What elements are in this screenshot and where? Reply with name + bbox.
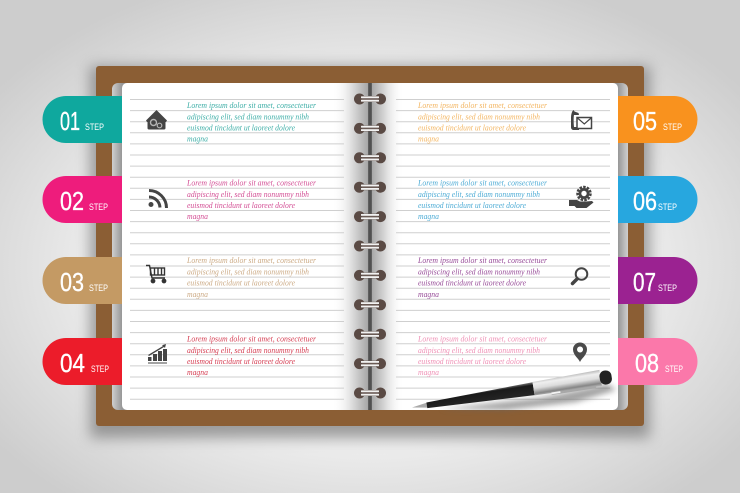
text block 7: adipiscing elit, sed diam nonummy nibh [418,266,540,276]
icon: map pin [573,342,587,362]
text block 8: Lorem ipsum dolor sit amet, consectetuer [417,334,548,344]
tab 06: 06 [633,186,657,216]
tab 08: STEP [665,364,683,375]
tab 08 [618,338,698,385]
text block 6: magna [418,211,439,221]
tab 04 [42,338,122,385]
text block 3: adipiscing elit, sed diam nonummy nibh [187,266,309,276]
under sheets [112,83,628,410]
tab 05: 05 [633,106,657,136]
text block 5: Lorem ipsum dolor sit amet, consectetuer [417,100,548,110]
text block 4: adipiscing elit, sed diam nonummy nibh [187,345,309,355]
tab 02: 02 [60,186,84,216]
tabs [42,96,697,385]
text block 6 [417,178,548,221]
tab 02: STEP [89,202,108,213]
tab 06: STEP [658,202,677,213]
text block 7 [417,255,548,299]
icon: rss [148,190,166,208]
pen [411,368,616,416]
tab 01 [42,96,122,143]
notebook pages [122,83,618,410]
text block 1: adipiscing elit, sed diam nonummy nibh [187,112,309,122]
tab 07 [618,257,698,304]
text block 4 [186,334,317,377]
text block 2: euismod tincidunt ut laoreet dolore [187,200,295,210]
icon: magnifier [572,268,587,284]
text block 2: magna [187,211,208,221]
text block 2: Lorem ipsum dolor sit amet, consectetuer [186,178,317,188]
text block 8 [417,334,548,377]
text block 1: Lorem ipsum dolor sit amet, consectetuer [186,100,317,110]
notebook cover [90,66,650,438]
text block 4: euismod tincidunt ut laoreet dolore [187,356,295,366]
tab 01: 01 [60,106,80,136]
tab 07: 07 [633,267,656,297]
tab 07: STEP [658,283,677,294]
tab 03: 03 [60,267,84,297]
text block 6: euismod tincidunt ut laoreet dolore [418,200,526,210]
text block 7: Lorem ipsum dolor sit amet, consectetuer [417,255,548,265]
text block 6: adipiscing elit, sed diam nonummy nibh [418,189,540,199]
icon: growth chart [148,344,167,364]
tab 08: 08 [635,348,659,378]
text block 4: magna [187,367,208,377]
spiral rings [354,94,386,398]
tab 04: STEP [91,364,109,375]
text block 2: adipiscing elit, sed diam nonummy nibh [187,189,309,199]
tab 02 [42,176,122,223]
text block 8: magna [418,367,439,377]
text block 3: magna [187,289,208,299]
tab 03 [42,257,122,304]
tab 04: 04 [60,348,85,378]
text block 1: euismod tincidunt ut laoreet dolore [187,122,295,132]
icon: house with gears [146,110,167,130]
tab 06 [618,176,698,223]
text block 3 [186,255,317,299]
icon: hand with gear [569,187,594,208]
text block 2 [186,178,317,221]
icon: phone and mail [571,110,592,130]
text block 3: Lorem ipsum dolor sit amet, consectetuer [186,255,317,265]
tab 01: STEP [85,122,104,133]
text block 5: adipiscing elit, sed diam nonummy nibh [418,112,540,122]
text block 8: euismod tincidunt ut laoreet dolore [418,356,526,366]
text block 5: magna [418,134,439,144]
text block 4: Lorem ipsum dolor sit amet, consectetuer [186,334,317,344]
tab 03: STEP [89,283,108,294]
text block 5: euismod tincidunt ut laoreet dolore [418,122,526,132]
text block 7: euismod tincidunt ut laoreet dolore [418,278,526,288]
tab 05 [618,96,698,143]
text block 1 [186,100,317,144]
tab 05: STEP [663,122,682,133]
text block 5 [417,100,548,144]
text block 7: magna [418,289,439,299]
icon: shopping cart [146,266,166,283]
text block 3: euismod tincidunt ut laoreet dolore [187,278,295,288]
text block 1: magna [187,134,208,144]
text block 6: Lorem ipsum dolor sit amet, consectetuer [417,178,548,188]
text block 8: adipiscing elit, sed diam nonummy nibh [418,345,540,355]
ruled lines [130,100,610,399]
